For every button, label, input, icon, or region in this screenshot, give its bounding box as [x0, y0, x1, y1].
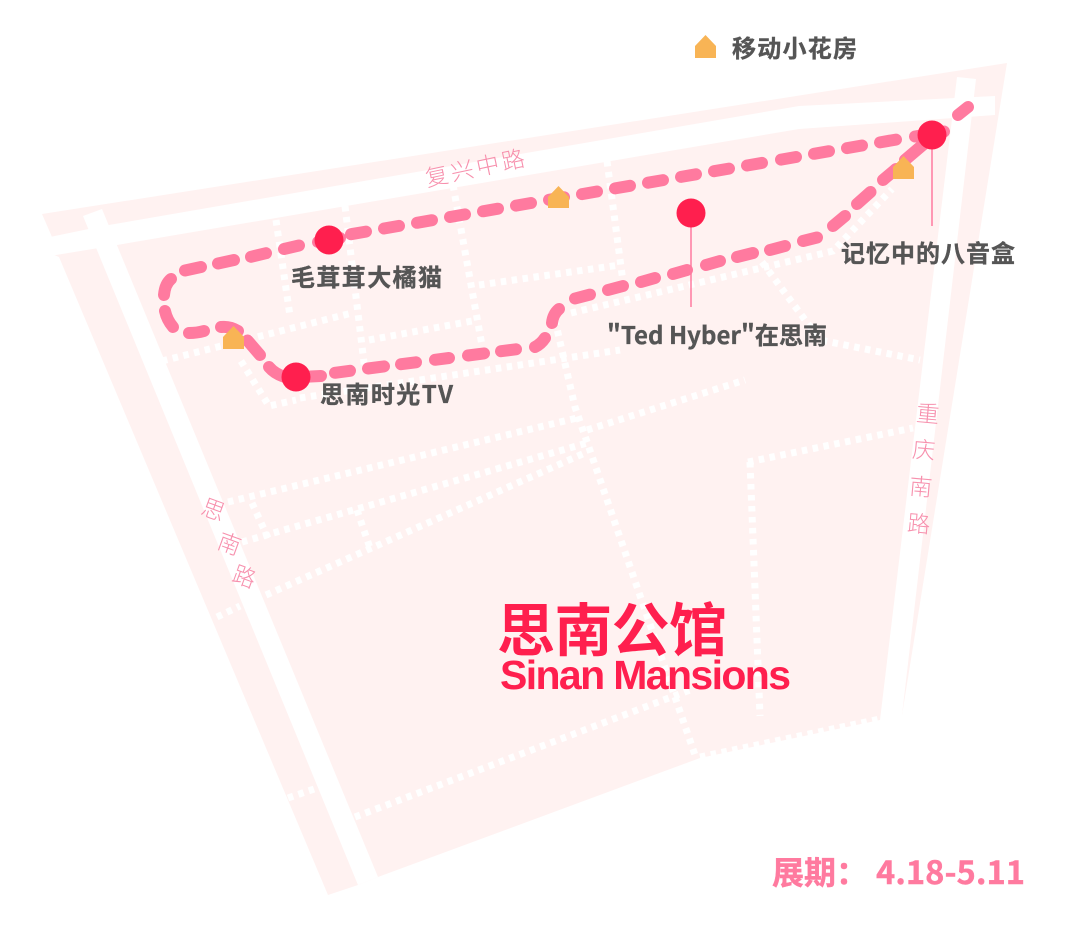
- stop: Sinan time TV: [282, 362, 453, 410]
- road label: Chongqing South Road: 路: [906, 504, 932, 540]
- title: Sinan Mansions: [497, 584, 791, 698]
- road label: Fuxing Middle Road: 复兴中路: [422, 139, 530, 193]
- exhibition dates: 展期：: [772, 848, 868, 894]
- stop: fluffy orange cat: [291, 226, 442, 293]
- map background block: [42, 63, 1007, 895]
- icon: flower house at northeast: [893, 156, 914, 179]
- road label: Sinan Road: 路: [228, 555, 262, 595]
- legend: mobile flower house: 移动小花房: [732, 29, 857, 64]
- road: Chongqing South Road: [880, 77, 976, 730]
- title: Sinan Mansions: 思南公馆: [497, 584, 727, 668]
- stop: Sinan time TV: 思南时光TV: [320, 375, 453, 410]
- icon: flower house at west bend: [223, 326, 244, 349]
- stop: music box in memory: [841, 120, 1015, 269]
- stop: fluffy orange cat: 毛茸茸大橘猫: [291, 258, 442, 293]
- icon: flower house at Fuxing Road: [548, 186, 569, 208]
- road label: Chongqing South Road: 重: [915, 394, 941, 430]
- road label: Sinan Road: 思: [197, 488, 231, 528]
- road label: Chongqing South Road: 庆: [911, 430, 937, 466]
- road label: Chongqing South Road: [906, 394, 941, 540]
- stop: music box in memory: 记忆中的八音盒: [841, 234, 1015, 269]
- exhibition dates: 4.18-5.11: [876, 848, 1025, 894]
- road label: Sinan Road: 南: [213, 522, 247, 562]
- road label: Sinan Road: [197, 488, 262, 595]
- walking route dashed line: [164, 107, 968, 377]
- road: Sinan Road: [83, 209, 378, 885]
- road: Fuxing Middle Road: [50, 96, 995, 256]
- road label: Chongqing South Road: 南: [908, 467, 934, 503]
- stop: Ted Hyber in Sinan: [607, 198, 827, 351]
- title: Sinan Mansions: Sinan Mansions: [500, 652, 791, 698]
- stop: Ted Hyber in Sinan: "Ted Hyber"在思南: [607, 316, 827, 351]
- dotted alley network: [162, 161, 920, 817]
- exhibition dates: [772, 848, 1025, 894]
